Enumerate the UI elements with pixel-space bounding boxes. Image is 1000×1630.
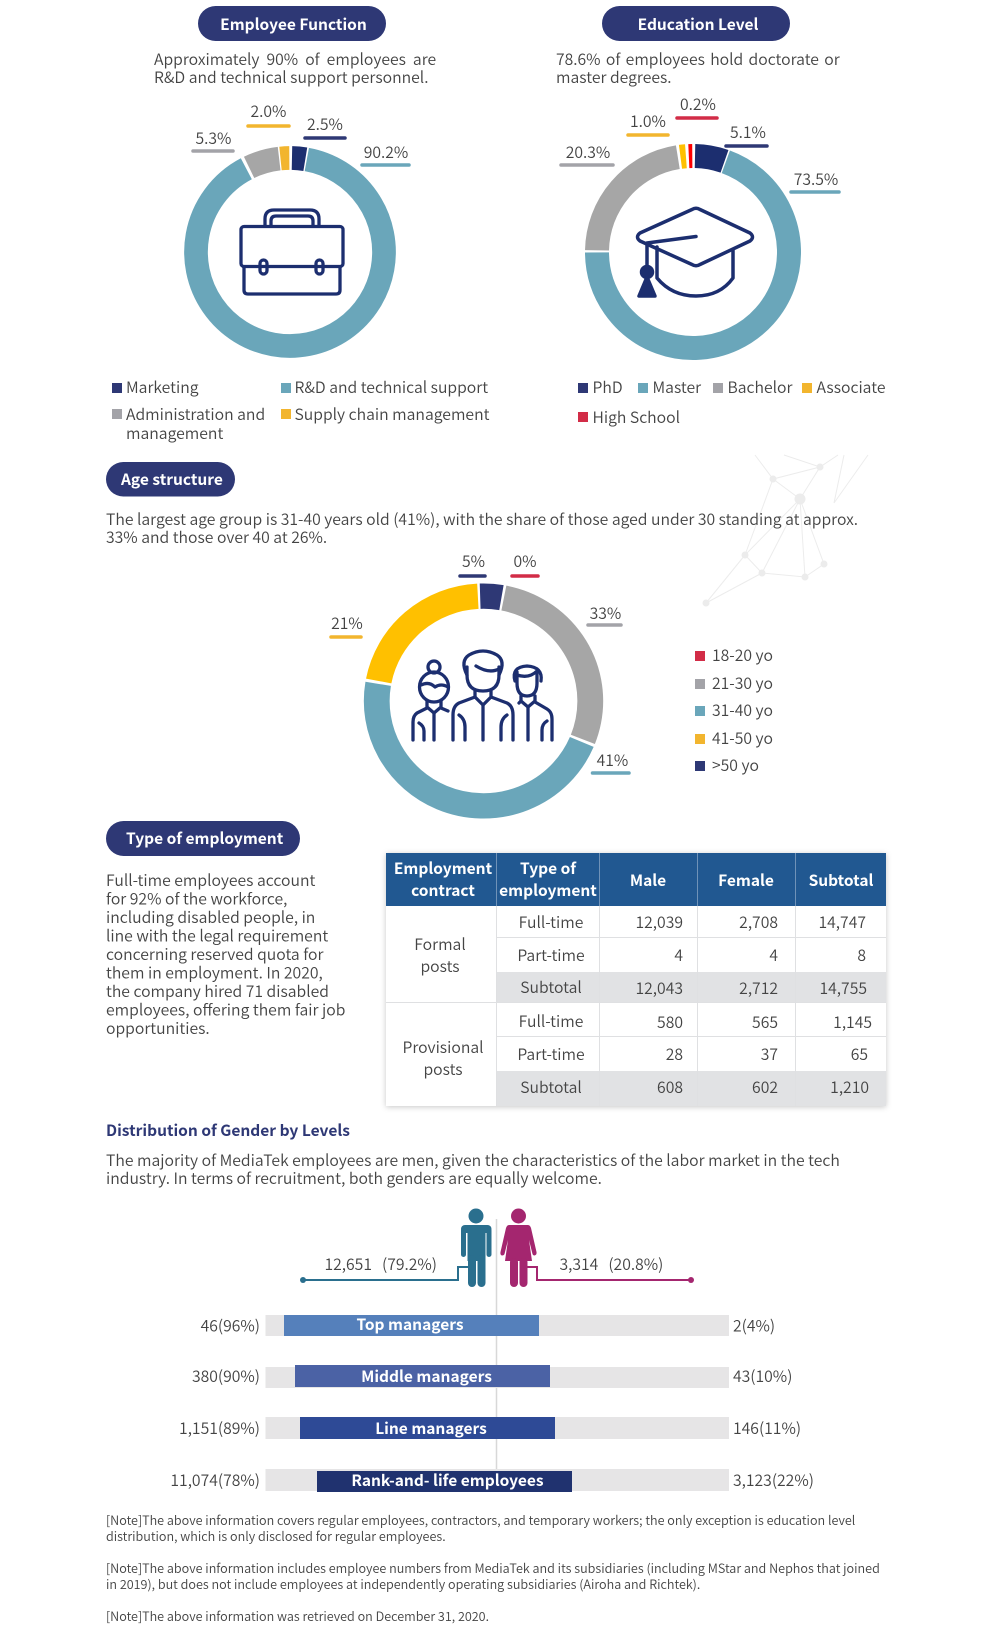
table: employment contract: employment xyxy=(499,879,597,901)
text: employee function summary: Approximately 90% of employees are xyxy=(154,47,436,70)
table: employment contract: 2,708 xyxy=(739,910,778,933)
legend: education level: PhD xyxy=(592,375,623,398)
table: employment contract: 14,755 xyxy=(820,976,867,999)
table: employment contract: 37 xyxy=(761,1042,778,1065)
legend: employee function: Marketing xyxy=(126,375,199,398)
text: employment summary: for 92% of the workforce, xyxy=(106,886,287,910)
legend: age: 31-40 yo xyxy=(712,698,773,721)
legend: employee function: R&D and technical support xyxy=(294,375,488,398)
chart: employee function donut xyxy=(164,126,416,378)
label: male total: 12,651 (79.2%) xyxy=(324,1252,437,1275)
table: employment contract: 565 xyxy=(752,1010,778,1033)
legend: employee function: management xyxy=(126,421,223,444)
text: employee function summary: R&D and technical support personnel. xyxy=(154,65,428,88)
label: 73.5%: 73.5% xyxy=(794,167,838,190)
legend: employee function xyxy=(112,375,490,444)
icon: briefcase xyxy=(241,210,343,294)
label: 41%: 41% xyxy=(597,748,628,771)
text: employment summary: including disabled people, in xyxy=(106,905,315,928)
table: employment contract: Full-time xyxy=(519,1009,583,1032)
notes: [Note]The above information was retrieved on December 31, 2020. xyxy=(106,1606,489,1625)
text: gender summary: The majority of MediaTek employees are men, given the characteristics of the labor market in the tech xyxy=(106,1148,840,1171)
table: employment contract: 602 xyxy=(752,1075,778,1098)
bar: middle managers: 380(90%) xyxy=(192,1364,260,1387)
table: employment contract: 4 xyxy=(769,943,778,966)
legend: age: 41-50 yo xyxy=(712,726,773,749)
notes xyxy=(106,1510,880,1625)
notes: [Note]The above information covers regular employees, contractors, and temporary workers; the only exception is education level xyxy=(106,1510,855,1529)
table: employment contract: Subtotal xyxy=(520,1075,582,1098)
heading: age structure: Age structure xyxy=(120,468,223,490)
label: 20.3%: 20.3% xyxy=(566,140,610,163)
heading: employee function: Employee Function xyxy=(220,13,367,35)
bar: middle managers xyxy=(192,1364,792,1388)
bar: middle managers: 43(10%) xyxy=(733,1364,792,1387)
table: employment contract: Female xyxy=(718,869,774,891)
table: employment contract: Provisional xyxy=(402,1035,484,1058)
bar: line managers: Line managers xyxy=(375,1417,487,1439)
table: employment contract: 4 xyxy=(674,943,683,966)
heading: distribution of gender by levels: Distribution of Gender by Levels xyxy=(106,1119,350,1141)
table: employment contract: posts xyxy=(420,954,460,977)
axis: center line xyxy=(496,1219,498,1470)
label: 5.1%: 5.1% xyxy=(730,120,766,143)
heading: type of employment xyxy=(106,821,300,856)
icon: people xyxy=(413,651,552,740)
table: employment contract: Full-time xyxy=(519,910,583,933)
bar: rank-and-file employees: Rank-and- life employees xyxy=(351,1469,544,1491)
label: 5%: 5% xyxy=(462,549,485,572)
heading: education level xyxy=(602,6,790,41)
bar: top managers xyxy=(201,1313,775,1336)
text: employment summary: employees, offering them fair job xyxy=(106,998,345,1020)
label: 2.0%: 2.0% xyxy=(251,99,286,122)
legend: age: 18-20 yo xyxy=(712,643,773,666)
table: employment contract: 28 xyxy=(666,1042,683,1065)
legend: education level: Associate xyxy=(816,375,885,398)
bar: line managers: 146(11%) xyxy=(733,1416,801,1439)
table: employment contract: Male xyxy=(630,869,666,891)
label: 90.2%: 90.2% xyxy=(364,140,408,163)
label: 0%: 0% xyxy=(513,549,537,572)
text: age summary: The largest age group is 31-40 years old (41%), with the share of those aged under 30 standing at approx. xyxy=(106,507,858,530)
label: female total: 3,314 (20.8%) xyxy=(560,1252,663,1275)
label: 21%: 21% xyxy=(331,611,363,634)
bar: line managers: 1,151(89%) xyxy=(179,1416,260,1439)
panel: type of employment xyxy=(106,821,886,1106)
table: employment contract: Part-time xyxy=(517,1042,585,1065)
text: age summary: 33% and those over 40 at 26%. xyxy=(106,525,327,548)
heading: type of employment: Type of employment xyxy=(126,827,284,849)
legend: employee function: Administration and xyxy=(126,402,265,425)
legend: education level xyxy=(578,375,885,428)
bar: top managers: 46(96%) xyxy=(201,1314,260,1336)
heading: education level: Education Level xyxy=(638,13,759,35)
table: employment contract: Type of xyxy=(520,857,577,879)
text: employment summary: line with the legal requirement xyxy=(106,924,328,946)
table: employment contract: Formal xyxy=(414,932,466,955)
text: employment summary: them in employment. In 2020, xyxy=(106,960,323,984)
notes: [Note]The above information includes employee numbers from MediaTek and its subsidiaries (including MStar and Nephos that joined xyxy=(106,1558,880,1577)
icon: male figure with leader xyxy=(300,1208,492,1287)
table: employment contract xyxy=(386,853,886,1106)
label: 33%: 33% xyxy=(590,601,621,624)
table: employment contract: 2,712 xyxy=(739,976,778,999)
icon: female figure with leader xyxy=(500,1208,694,1287)
legend: education level: High School xyxy=(592,405,680,428)
chart: age donut xyxy=(344,563,623,839)
notes: distribution, which is only disclosed for regular employees. xyxy=(106,1526,446,1545)
text: gender summary: industry. In terms of recruitment, both genders are equally welcome. xyxy=(106,1166,602,1189)
table: employment contract: 1,210 xyxy=(830,1075,869,1098)
legend: education level: Master xyxy=(652,375,701,398)
label: 1.0%: 1.0% xyxy=(630,109,666,132)
table: employment contract: 12,043 xyxy=(636,976,683,999)
text: employment summary: the company hired 71 disabled xyxy=(106,979,329,1002)
label: 0.2%: 0.2% xyxy=(680,92,716,115)
table: employment contract: contract xyxy=(411,879,475,901)
table: employment contract: 65 xyxy=(851,1042,868,1065)
bar: line managers xyxy=(179,1416,801,1439)
table: employment contract: 8 xyxy=(857,943,866,966)
icon: graduation cap xyxy=(638,208,752,296)
text: employment summary: Full-time employees account xyxy=(106,868,315,891)
bar: rank-and-file employees xyxy=(170,1468,814,1492)
table: employment contract: Subtotal xyxy=(809,869,874,891)
text: education summary: 78.6% of employees hold doctorate or xyxy=(556,47,840,70)
table: employment contract: posts xyxy=(423,1057,463,1080)
table: employment contract: 1,145 xyxy=(833,1010,872,1033)
table: employment contract: Subtotal xyxy=(520,975,582,998)
text: employment summary: concerning reserved quota for xyxy=(106,942,324,965)
table: employment contract: Employment xyxy=(394,857,493,879)
legend: age: 21-30 yo xyxy=(712,671,773,694)
legend: age xyxy=(695,643,773,776)
heading: employee function xyxy=(198,6,386,41)
chart: education level donut xyxy=(570,129,816,375)
table: employment contract: Part-time xyxy=(517,943,585,966)
table: employment contract: 14,747 xyxy=(819,910,866,933)
bar: rank-and-file employees: 11,074(78%) xyxy=(170,1468,260,1491)
label: 2.5%: 2.5% xyxy=(307,112,343,135)
panel: employee function xyxy=(112,6,490,444)
bar: middle managers: Middle managers xyxy=(361,1365,492,1387)
legend: age: >50 yo xyxy=(712,753,759,776)
panel: education level xyxy=(556,6,885,428)
label: 5.3%: 5.3% xyxy=(196,126,231,149)
legend: employee function: Supply chain management xyxy=(294,402,490,425)
bar: top managers: Top managers xyxy=(356,1313,464,1335)
text: employment summary: opportunities. xyxy=(106,1016,210,1039)
table: employment contract: 12,039 xyxy=(636,910,683,933)
bar: rank-and-file employees: 3,123(22%) xyxy=(733,1468,814,1491)
notes: in 2019), but does not include employees at independently operating subsidiaries (Airoha and Richtek). xyxy=(106,1574,700,1593)
text: education summary: master degrees. xyxy=(556,65,672,88)
legend: education level: Bachelor xyxy=(728,375,793,398)
table: employment contract: 608 xyxy=(657,1075,683,1098)
bar: top managers: 2(4%) xyxy=(733,1314,775,1336)
heading: age structure xyxy=(106,462,235,496)
decoration: network pattern xyxy=(703,455,868,606)
panel: distribution of gender xyxy=(106,1119,840,1492)
table: employment contract: 580 xyxy=(657,1010,683,1033)
panel: age structure xyxy=(106,462,858,839)
